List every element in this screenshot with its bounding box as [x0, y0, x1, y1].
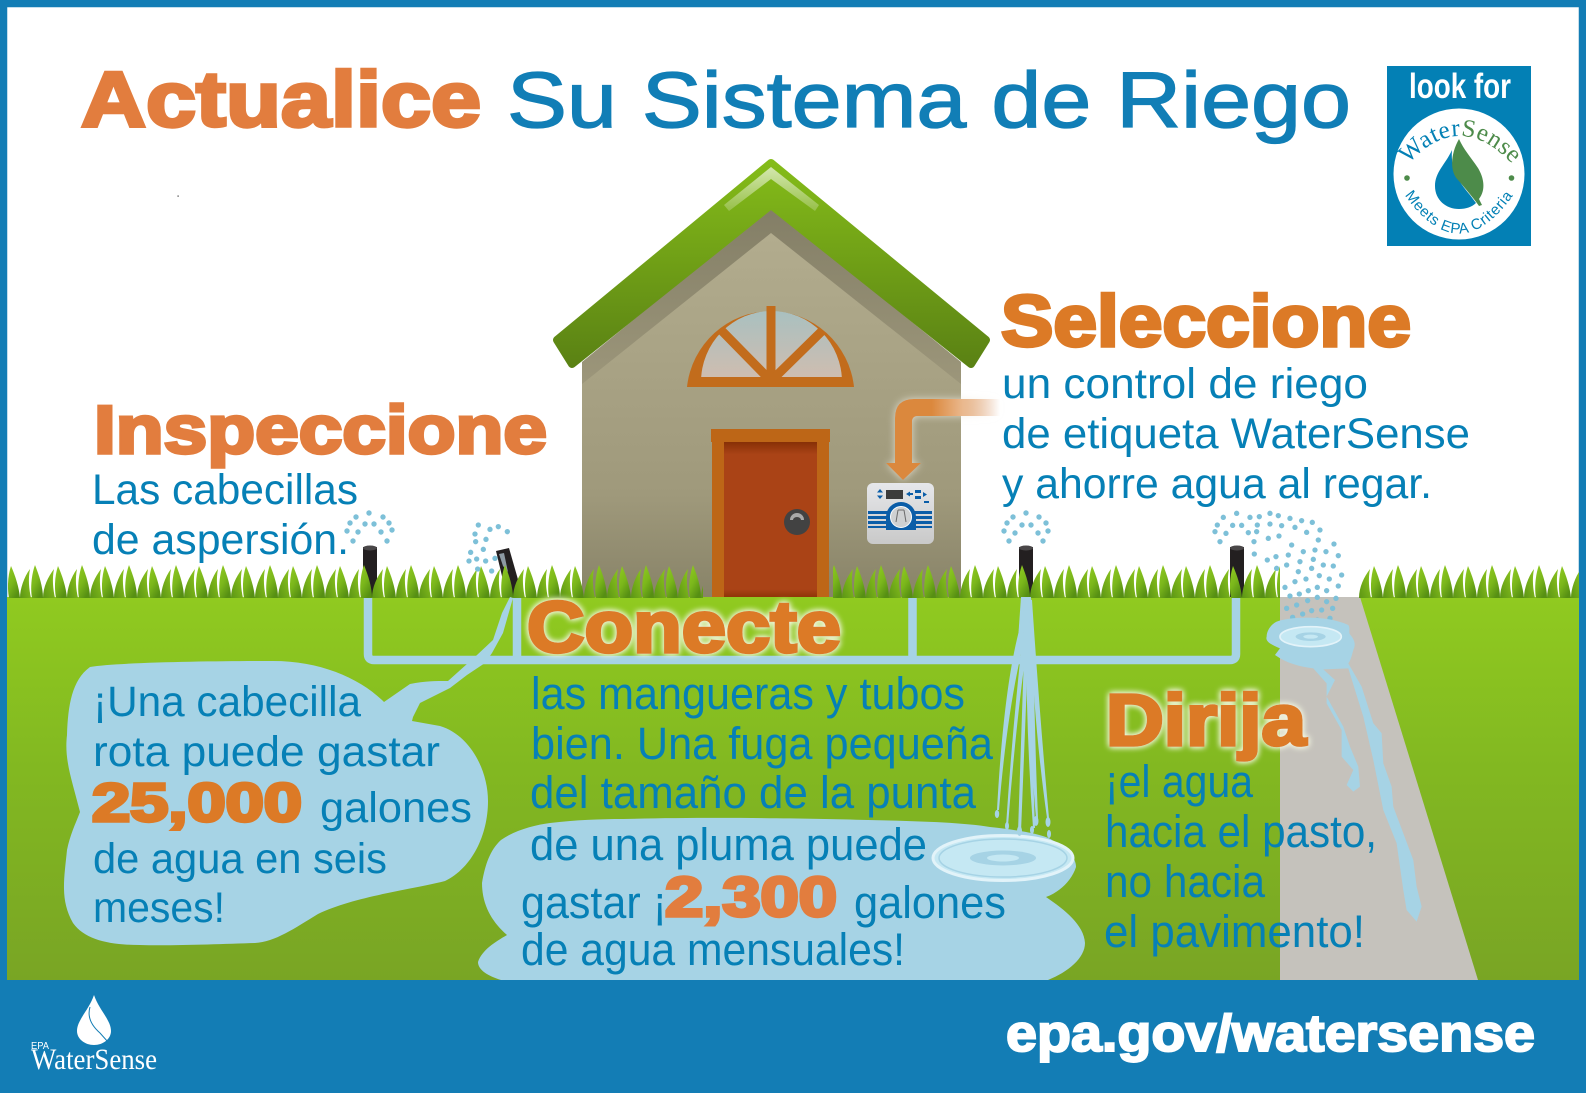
footer logo: EPA WaterSense: WaterSense: [31, 1043, 157, 1076]
heading block: Inspeccione: Las cabecillas: [92, 466, 358, 514]
stray dot: [178, 196, 179, 197]
badge: look for WaterSense: WaterSense: [1397, 120, 1518, 162]
callout text: broken head: de agua en seis: [93, 835, 387, 883]
callout text: broken head: [92, 678, 472, 932]
icon: broken sprinkler head: [496, 548, 523, 597]
house wall: [582, 233, 961, 597]
heading block: Dirija: ¡el agua: [1105, 756, 1254, 807]
heading block: Dirija: Dirija: [1106, 681, 1307, 761]
water spray head 1: [344, 510, 395, 544]
heading block: Conecte: las mangueras y tubos: [531, 668, 965, 719]
title: Su Sistema de Riego: [507, 55, 1351, 144]
callout text: broken head: rota puede gastar: [93, 728, 440, 776]
icon: sprinkler head upright 4: [1230, 546, 1244, 597]
heading block: Conecte: gastar ¡: [521, 877, 667, 928]
green roof: [557, 163, 986, 364]
heading block: Seleccione: un control de riego: [1002, 360, 1368, 408]
heading block: Dirija: el pavimento!: [1104, 906, 1365, 957]
heading block: Dirija: no hacia: [1105, 856, 1266, 907]
puddle ripples: [933, 836, 1073, 880]
heading block: Inspeccione: de aspersión.: [92, 516, 349, 564]
icon: irrigation controller: [867, 483, 934, 544]
badge: look for WaterSense: Meets EPA Criteria: [1405, 190, 1513, 234]
door: [711, 429, 830, 597]
heading block: Conecte: de agua mensuales!: [521, 924, 905, 975]
grass strip centre: [833, 565, 1280, 598]
badge: look for WaterSense: look for: [1409, 67, 1511, 106]
heading block: Seleccione: de etiqueta WaterSense: [1002, 410, 1470, 458]
footer logo: EPA WaterSense: [31, 995, 157, 1076]
centre water puddle: [478, 818, 1085, 980]
title: Actualice: [81, 55, 481, 143]
house illustration: [557, 163, 986, 597]
heading block: Seleccione: [1001, 282, 1470, 508]
heading block: Dirija: [1104, 681, 1377, 957]
house wall shadow band: [582, 207, 961, 597]
heading block: Conecte: del tamaño de la punta: [530, 767, 977, 818]
title: [81, 55, 1351, 144]
grass strip left: [8, 565, 703, 598]
footer url: epa.gov/watersense: [1006, 1005, 1535, 1063]
pavement sidewalk: [1280, 597, 1478, 980]
water spray head 3: [1001, 510, 1051, 544]
heading block: Conecte: galones: [854, 877, 1006, 928]
callout text: broken head: galones: [320, 784, 472, 832]
fan window: [687, 306, 854, 387]
irrigation pipes: [368, 597, 1236, 660]
heading block: Conecte: Conecte: [527, 588, 841, 668]
water spray over pavement: [1212, 511, 1344, 634]
heading block: Seleccione: y ahorre agua al regar.: [1002, 460, 1432, 508]
jet drips: [995, 810, 1051, 838]
heading block: Conecte: 2,300: [665, 865, 837, 928]
icon: sprinkler head upright 1: [363, 546, 377, 597]
callout text: broken head: 25,000: [92, 773, 302, 833]
grass strip right: [1359, 565, 1579, 598]
footer logo: EPA WaterSense: EPA: [31, 1041, 49, 1052]
icon: sprinkler head upright 3: [1019, 546, 1033, 597]
leak from broken sprinkler and left callout: [64, 597, 513, 945]
lawn ground: [7, 597, 1579, 981]
heading block: Conecte: [521, 588, 1006, 975]
leak water jets: [995, 597, 1051, 838]
badge: look for WaterSense: [1387, 66, 1531, 246]
heading block: Conecte: de una pluma puede: [530, 819, 927, 870]
callout text: broken head: meses!: [93, 884, 225, 932]
water spray broken head: [466, 522, 510, 574]
heading block: Inspeccione: Inspeccione: [94, 392, 547, 468]
heading block: Dirija: hacia el pasto,: [1105, 806, 1377, 857]
footer band: [0, 980, 1586, 1093]
heading block: Seleccione: Seleccione: [1001, 282, 1411, 362]
runoff puddle on pavement: [1266, 618, 1422, 922]
heading block: Conecte: bien. Una fuga pequeña: [531, 718, 994, 769]
heading block: Inspeccione: [92, 392, 547, 564]
arrow to controller: [886, 399, 1000, 480]
roof highlight: [724, 167, 819, 211]
callout text: broken head: ¡Una cabecilla: [93, 678, 361, 726]
